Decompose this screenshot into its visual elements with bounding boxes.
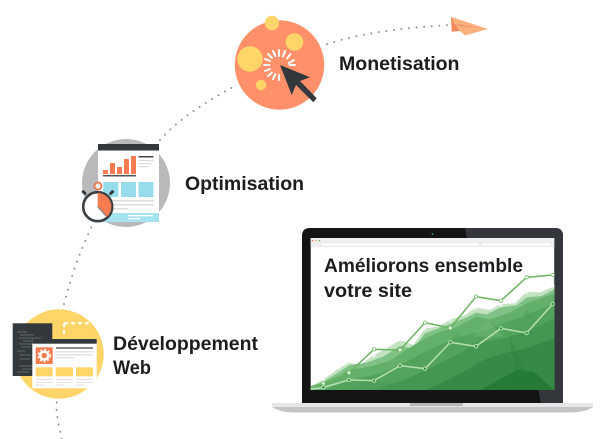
laptop heading: Améliorons ensemble bbox=[324, 255, 523, 277]
dotted journey path bbox=[57, 25, 452, 439]
lower line series bbox=[311, 302, 554, 389]
icon: monetisation circle with cursor bbox=[235, 16, 324, 110]
laptop bbox=[272, 228, 593, 412]
laptop base bbox=[272, 403, 593, 412]
label: Développement Web: Web bbox=[113, 357, 151, 379]
label: Développement Web bbox=[113, 333, 259, 379]
icon: web development screens bbox=[13, 309, 104, 399]
laptop body bbox=[302, 228, 563, 403]
area chart bbox=[311, 284, 555, 390]
label: Optimisation: Optimisation bbox=[185, 173, 304, 195]
laptop heading: votre site bbox=[324, 280, 412, 302]
icon: paper plane bbox=[451, 17, 488, 36]
upper line series bbox=[311, 273, 554, 387]
laptop heading bbox=[324, 255, 523, 302]
label: Monetisation: Monetisation bbox=[339, 53, 460, 75]
browser chrome bbox=[311, 238, 554, 247]
screen bbox=[311, 238, 554, 390]
laptop body highlight bbox=[465, 228, 563, 403]
icon: optimisation report with stopwatch bbox=[82, 139, 170, 227]
label: Développement Web: Développement bbox=[113, 333, 259, 355]
